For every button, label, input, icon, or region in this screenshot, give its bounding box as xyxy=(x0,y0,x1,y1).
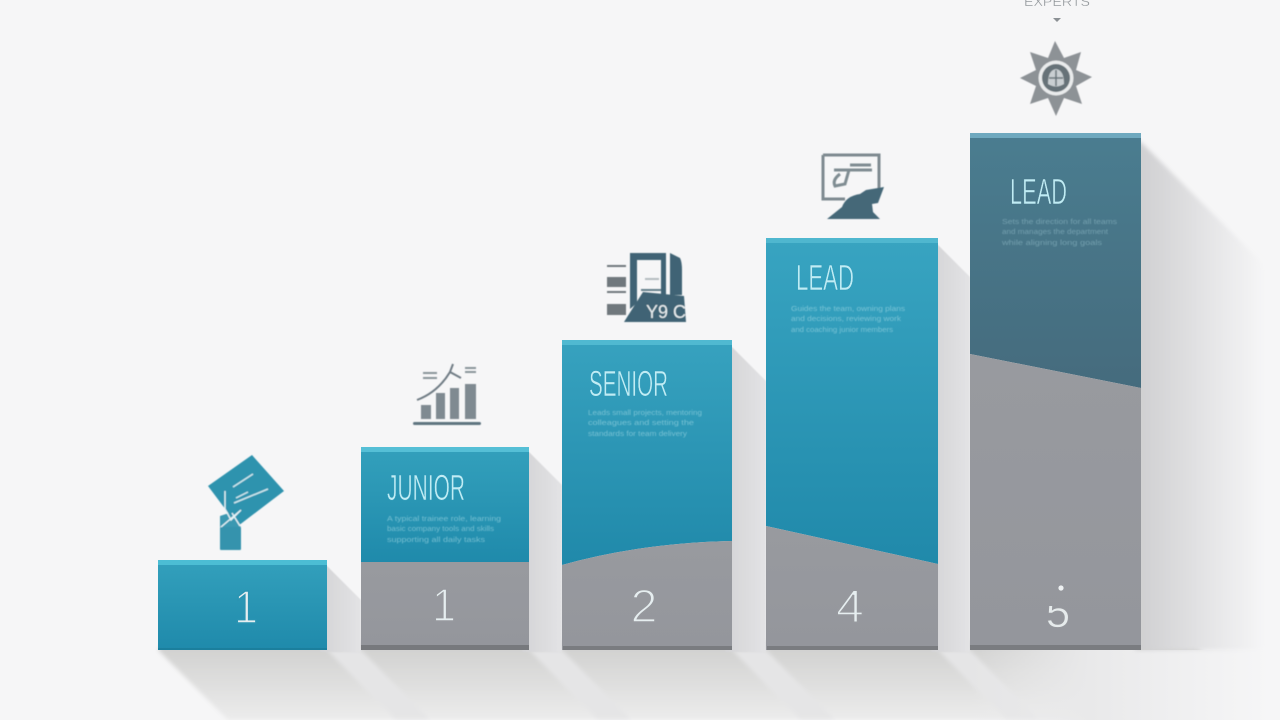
description: senior: standards for team delivery xyxy=(588,431,688,438)
heading: lead: LEAD xyxy=(796,257,854,298)
description: junior: A typical trainee role, learning xyxy=(387,516,501,523)
step 2 number: 1 xyxy=(432,579,456,631)
description: lead: and decisions, reviewing work xyxy=(791,316,902,323)
step 1 number: 1 xyxy=(234,581,258,633)
description: senior: Leads small projects, mentoring xyxy=(588,410,702,417)
floor and side shadows xyxy=(158,142,1280,720)
step 3 number: 2 xyxy=(630,580,658,632)
description: junior: supporting all daily tasks xyxy=(387,537,486,544)
icon: document with year xyxy=(607,253,686,322)
icon: star badge xyxy=(1020,41,1092,116)
heading: lead top: LEAD xyxy=(1010,171,1067,212)
description: lead top xyxy=(1001,219,1118,247)
step 1 bar xyxy=(158,560,327,650)
step 2 bar: junior xyxy=(361,447,529,650)
icon: tag on a block xyxy=(208,455,284,550)
description: lead: Guides the team, owning plans xyxy=(791,306,906,313)
description: senior: colleagues and setting the xyxy=(588,420,694,427)
icon: monitor with anvil xyxy=(823,155,884,219)
step 5 number: 5 xyxy=(1046,588,1070,637)
description: lead top: while aligning long goals xyxy=(1001,240,1103,247)
heading: junior: JUNIOR xyxy=(387,467,465,508)
step 4 number: 4 xyxy=(836,580,864,632)
description: senior xyxy=(588,410,702,438)
step 4 bar: lead xyxy=(766,238,938,650)
icon: small arrow xyxy=(1053,18,1061,22)
icon: bar chart xyxy=(413,364,481,425)
heading: senior: SENIOR xyxy=(589,363,668,404)
step 3 bar: senior xyxy=(562,340,732,650)
description: lead: and coaching junior members xyxy=(791,327,894,334)
step 5 bar: lead xyxy=(970,133,1141,650)
description: junior: basic company tools and skills xyxy=(387,526,495,533)
icon: document with year: Y9 C xyxy=(646,302,686,322)
step 5 number xyxy=(1048,585,1068,628)
description: lead top: Sets the direction for all teams xyxy=(1002,219,1118,226)
description: lead xyxy=(791,306,906,334)
description: lead top: and manages the department xyxy=(1002,229,1108,236)
description: junior xyxy=(387,516,501,544)
